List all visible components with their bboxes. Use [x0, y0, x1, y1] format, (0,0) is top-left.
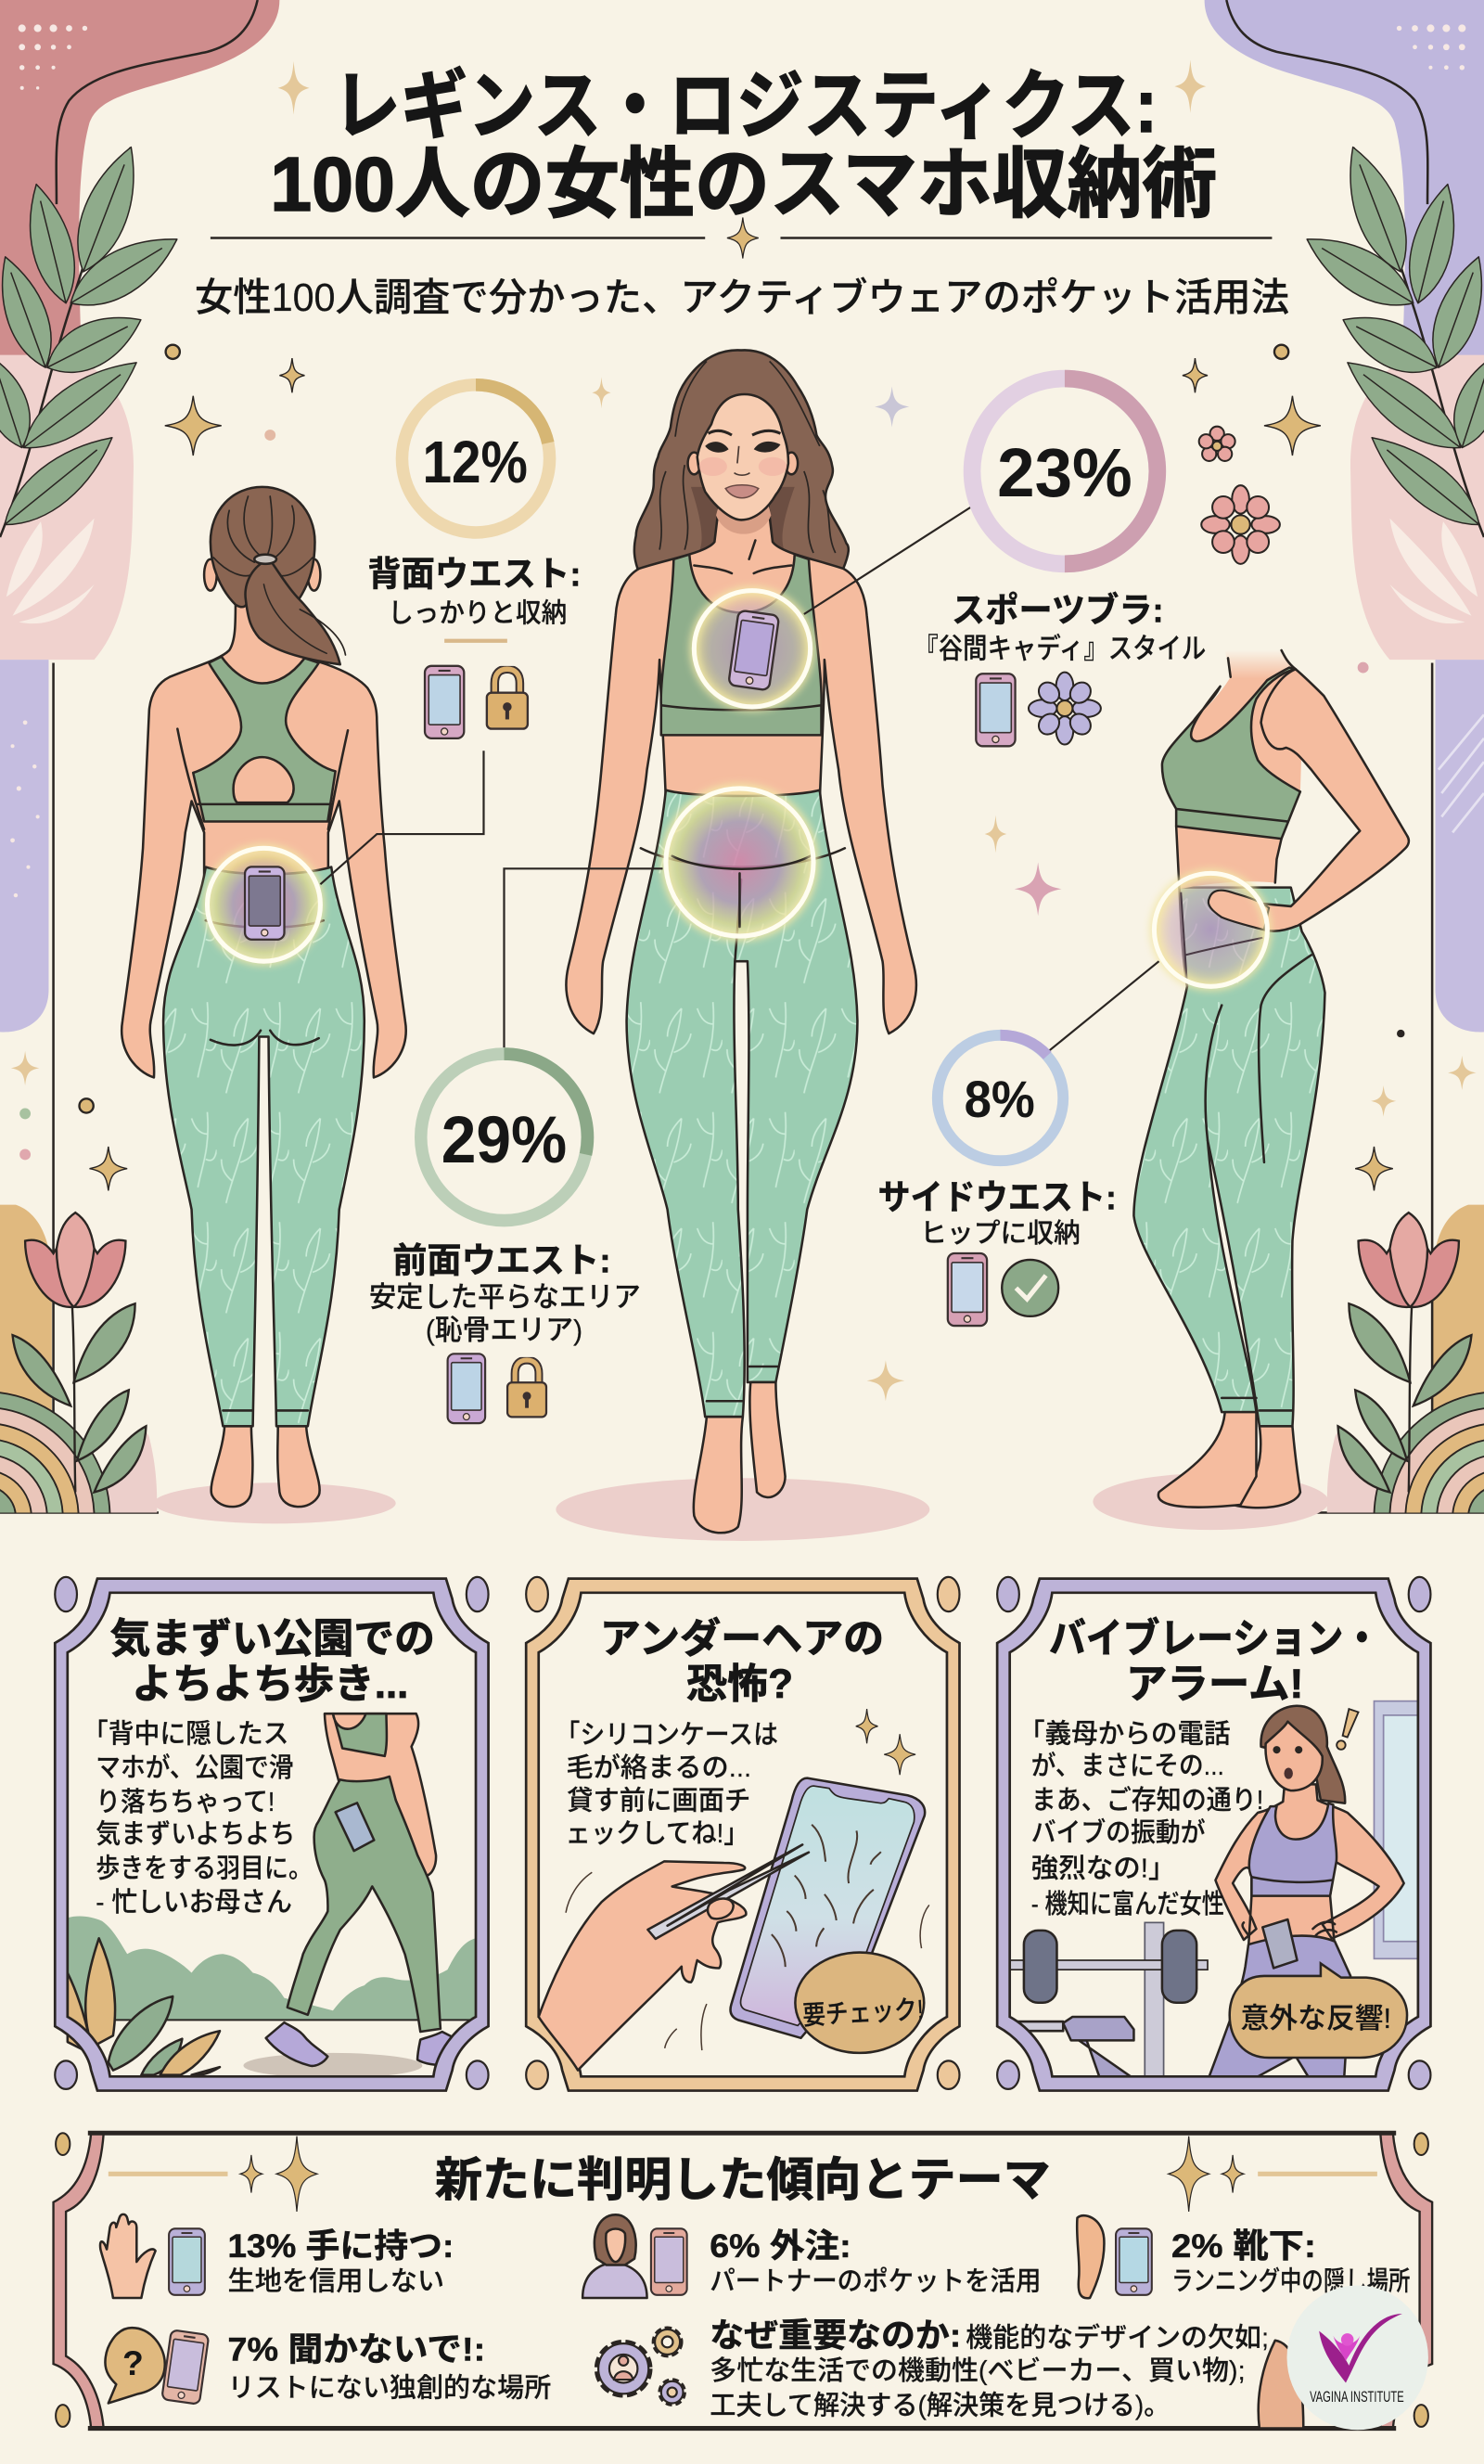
trend: 13% hold in hand: 生地を信用しない — [228, 2267, 444, 2297]
figure: back view — [122, 487, 406, 1507]
illustration: hand with tweezers — [539, 1844, 809, 2071]
botanical: bottom-left rainbow and tulip — [0, 1212, 158, 1512]
icon: flowers top right — [1199, 427, 1280, 564]
panel heading: よちよち歩き... — [132, 1662, 408, 1707]
sports bra front view — [661, 555, 822, 735]
illustration: park background — [68, 1917, 476, 2078]
panel heading: 新たに判明した傾向とテーマ — [435, 2153, 1051, 2206]
panel heading: 気まずい公園での — [110, 1616, 435, 1662]
panel quote — [83, 1720, 313, 1918]
feet front view — [694, 1382, 786, 1533]
title: レギンス・ロジスティクス: — [333, 64, 1158, 148]
panel heading — [1049, 1616, 1380, 1707]
icon: question bubble: ? — [122, 2343, 144, 2382]
botanical: left leaf branch — [0, 139, 188, 541]
icon: woman bust — [582, 2262, 647, 2298]
illustration: surprised woman — [1209, 1706, 1404, 2076]
trend: 2% under socks: ランニング中の隠し場所 — [1171, 2267, 1410, 2297]
callout: unexpected reaction — [1230, 1963, 1407, 2058]
panel heading — [600, 1616, 884, 1707]
stat: 12% back waist: しっかりと収納 — [388, 598, 567, 628]
panel: vibration alarm — [997, 1577, 1430, 2091]
subtitle: 女性100人調査で分かった、アクティブウェアのポケット活用法 — [195, 276, 1289, 319]
feet back view — [211, 1426, 320, 1507]
why it matters: 機能的なデザインの欠如; — [966, 2324, 1269, 2354]
icon: hand — [100, 2214, 156, 2298]
icon: lilac flower — [1029, 673, 1101, 745]
hair strands over shoulders front view — [659, 361, 836, 553]
body and arms front view — [566, 503, 916, 1033]
panel quote: 「シリコンケースは — [556, 1720, 778, 1750]
panel heading: アラーム! — [1126, 1662, 1303, 1707]
panel frame — [526, 1577, 959, 2091]
floor shadows — [154, 1473, 1328, 1541]
panel quote: 強烈なの!」 — [1031, 1854, 1175, 1883]
stat: 12% back waist: 12% — [422, 429, 528, 495]
botanical: bottom-right rainbow and tulip — [1326, 1212, 1484, 1512]
stat: 23% sports bra: スポーツブラ: — [952, 590, 1164, 629]
panel: new trends and themes — [54, 2133, 1432, 2430]
stat: 29% front waist: 安定した平らなエリア — [369, 1282, 641, 1314]
callout: unexpected reaction: 意外な反響! — [1241, 2003, 1391, 2034]
illustration: gym mirror — [1374, 1701, 1420, 1958]
trend: 2% under socks: 2% 靴下: — [1171, 2227, 1316, 2265]
panel quote — [1018, 1720, 1263, 1919]
stat: 29% front waist: 29% — [441, 1104, 567, 1177]
sports bra side view — [1162, 668, 1300, 839]
white leaf sprigs on pink blobs — [6, 519, 1478, 623]
panel quote: - 機知に富んだ女性 — [1031, 1890, 1224, 1919]
panel quote: バイブの振動が — [1031, 1818, 1206, 1848]
icon: question bubble — [105, 2328, 165, 2403]
stat: 8% side waist: サイドウエスト: — [877, 1178, 1117, 1217]
stat: 23% sports bra: 『谷間キャディ』スタイル — [914, 633, 1206, 664]
icon: exclamation mark — [1337, 1709, 1359, 1750]
frame lines — [0, 662, 1484, 1512]
panel quote: マホが、公園で滑 — [96, 1753, 294, 1783]
panel quote: 貸す前に画面チ — [567, 1786, 750, 1816]
stat: 29% front waist — [369, 1054, 641, 1423]
panel quote: 歩きをする羽目に。 — [96, 1854, 313, 1883]
panel heading: バイブレーション・ — [1049, 1616, 1380, 1662]
icon: gears — [598, 2329, 684, 2403]
stat: 8% side waist — [877, 1035, 1117, 1326]
why it matters: なぜ重要なのか: — [710, 2317, 961, 2355]
title — [270, 64, 1217, 227]
trend: 6% outsourcing: 6% 外注: — [710, 2227, 851, 2265]
panel quote: 「義母からの電話 — [1018, 1720, 1231, 1750]
trend: 6% outsourcing: パートナーのポケットを活用 — [710, 2267, 1042, 2297]
decorative dots: corners — [10, 24, 1465, 897]
highlighted ring: back waist — [207, 848, 320, 961]
why it matters: 多忙な生活での機動性(ベビーカー、買い物); — [710, 2356, 1246, 2386]
stat: 29% front waist: 前面ウエスト: — [392, 1240, 611, 1279]
logo: Vagina Institute — [1287, 2285, 1428, 2430]
illustration: barbell and bench — [1010, 1922, 1208, 2076]
highlighted ring: sports bra — [694, 591, 811, 707]
panel frame — [55, 1577, 489, 2091]
trend: 13% hold in hand — [100, 2214, 454, 2298]
botanical: right leaf branch — [1296, 139, 1484, 541]
logo: Vagina Institute: VAGINA INSTITUTE — [1310, 2388, 1404, 2406]
panel quote: 毛が絡まるの... — [566, 1753, 751, 1783]
leggings side view — [1133, 888, 1324, 1426]
stat: 23% sports bra — [914, 379, 1206, 746]
background: top-right corner blobs — [1205, 0, 1484, 1512]
figure: front view — [566, 350, 916, 1533]
trend: 2% under socks — [1077, 2215, 1410, 2298]
sparkles — [856, 1709, 915, 1775]
panel: awkward park waddle — [55, 1577, 489, 2091]
stat: 12% back waist — [367, 385, 581, 738]
heading ornaments — [109, 2137, 1377, 2212]
panel heading — [110, 1616, 435, 1707]
panel frame — [54, 2133, 1432, 2429]
icon: check badge — [1002, 1260, 1058, 1316]
panel quote: ェックしてね!」 — [566, 1819, 749, 1849]
racerback bra — [193, 657, 336, 822]
icon: foot — [1077, 2215, 1104, 2298]
feet side view — [1158, 1412, 1300, 1508]
stat: 8% side waist: ヒップに収納 — [920, 1219, 1081, 1249]
panel quote — [556, 1720, 778, 1849]
why it matters: 工夫して解決する(解決策を見つける)。 — [710, 2391, 1170, 2420]
torso side view — [1162, 650, 1303, 889]
sparkles scattered — [11, 59, 1477, 1401]
stat: 23% sports bra: 23% — [997, 434, 1132, 511]
panel heading: アンダーヘアの — [600, 1616, 884, 1662]
why it matters — [598, 2317, 1269, 2420]
highlighted ring: side waist — [1154, 873, 1269, 986]
trend: 13% hold in hand: 13% 手に持つ: — [228, 2227, 454, 2265]
leggings back view — [163, 867, 365, 1426]
title divider — [211, 217, 1272, 259]
leggings front view — [627, 790, 857, 1417]
hair and ponytail — [204, 487, 345, 664]
stat: 29% front waist: (恥骨エリア) — [426, 1315, 582, 1346]
title: 100人の女性のスマホ収納術 — [270, 141, 1217, 227]
highlighted ring: front waist — [666, 789, 813, 936]
figure: side view — [1133, 650, 1409, 1508]
stat: 8% side waist: 8% — [965, 1070, 1035, 1128]
trend: 7% don't ask: 7% 聞かないで!: — [228, 2331, 485, 2368]
illustration: partial hand behind logo — [1259, 2341, 1303, 2429]
body and arms back view — [122, 597, 406, 1077]
connector lines — [320, 507, 1159, 1051]
trend: 7% don't ask: リストにない独創的な場所 — [228, 2374, 551, 2404]
stat: 12% back waist: 背面ウエスト: — [367, 555, 581, 594]
panel: underhair horror — [526, 1577, 959, 2091]
trend: 7% don't ask — [105, 2328, 551, 2405]
panel heading: 恐怖? — [686, 1662, 793, 1707]
callout: needs check: 要チェック! — [802, 1996, 924, 2031]
panel quote: - 忙しいお母さん — [96, 1888, 292, 1918]
illustration: phone with hairs — [566, 1778, 929, 2050]
head front view — [688, 394, 798, 520]
callout: needs check — [795, 1953, 924, 2053]
panel quote: 気まずいよちよち — [96, 1820, 295, 1850]
illustration: walking woman — [266, 1713, 460, 2066]
panel quote: が、まさにその... — [1031, 1752, 1224, 1781]
panel frame — [997, 1577, 1430, 2091]
background: top-left corner blobs — [0, 0, 279, 1512]
panel quote: り落ちちゃって! — [96, 1788, 275, 1817]
trend: 6% outsourcing — [582, 2214, 1042, 2298]
panel quote: 「背中に隠したス — [83, 1720, 289, 1750]
hair back front view — [634, 350, 849, 569]
arm side view — [1256, 669, 1409, 931]
panel quote: まあ、ご存知の通り! — [1031, 1786, 1263, 1816]
